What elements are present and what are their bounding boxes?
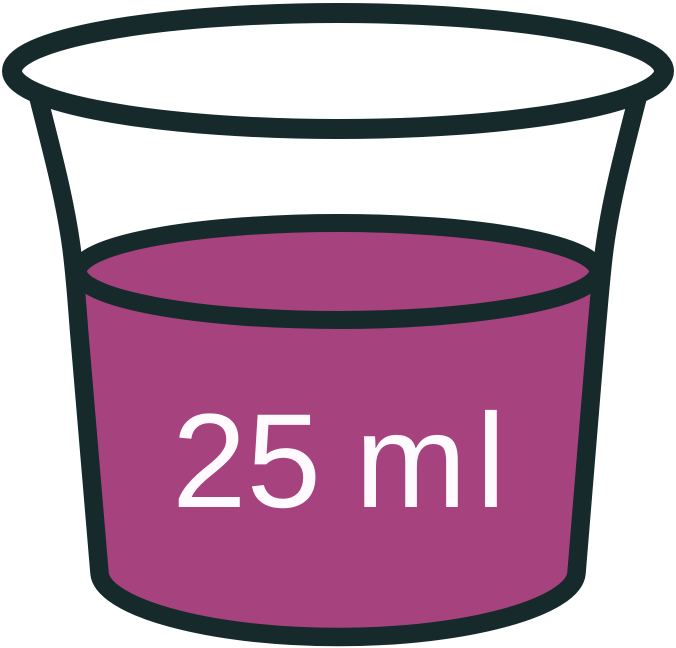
cup walls and base outline — [38, 96, 638, 637]
liquid body — [78, 290, 598, 637]
volume label: m — [355, 387, 467, 536]
cup rim — [12, 13, 664, 129]
liquid surface — [78, 223, 598, 320]
volume label: 25 — [172, 387, 321, 536]
volume label: l — [476, 387, 506, 536]
